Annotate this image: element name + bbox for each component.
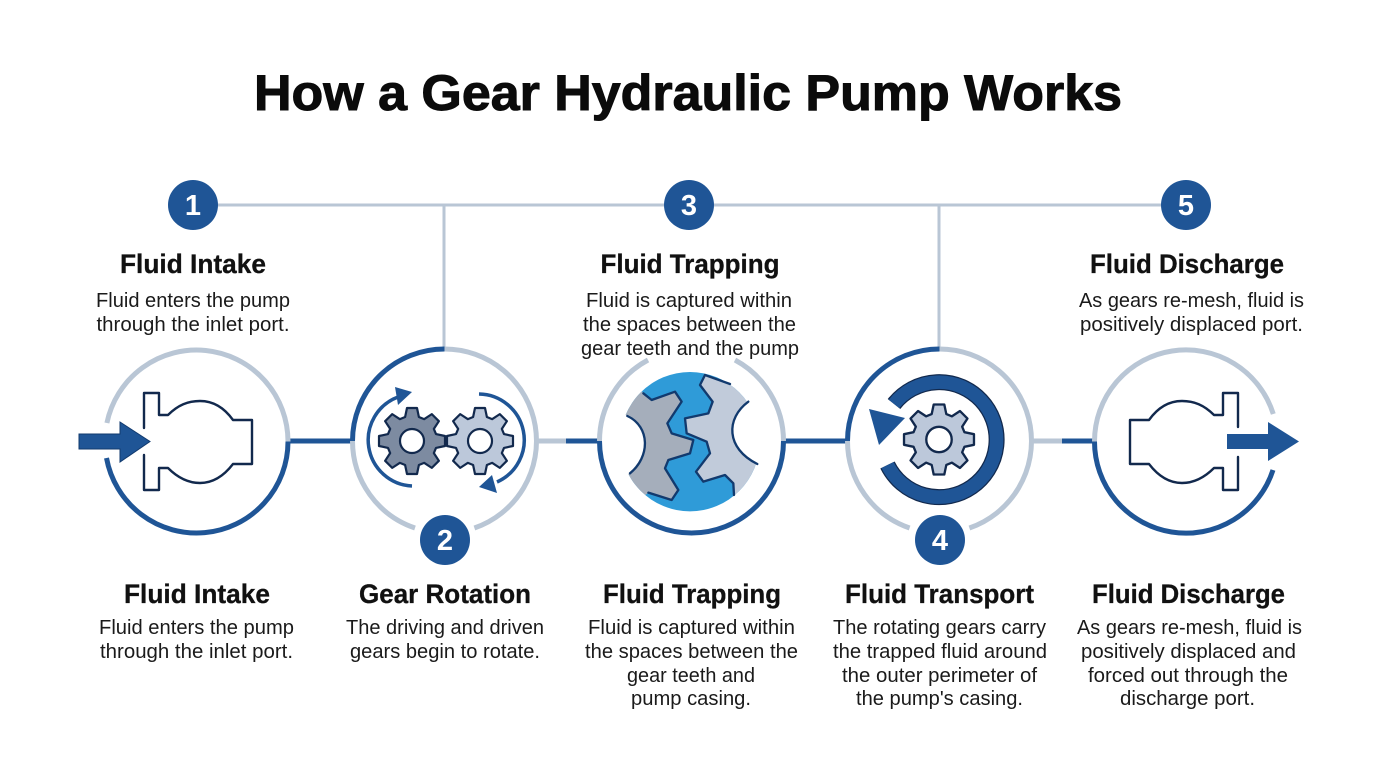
badge 3: 3: [681, 190, 697, 222]
description: gear rotation: The driving and driven: [346, 616, 544, 639]
description: fluid discharge: discharge port.: [1120, 687, 1255, 710]
description: fluid trapping: [585, 616, 798, 710]
heading: fluid intake: Fluid Intake: [124, 579, 270, 609]
left concave cut: [613, 407, 645, 483]
gear cross-section: [626, 372, 758, 512]
badge 4: 4: [932, 525, 948, 557]
badge 2: 2: [437, 525, 453, 557]
description: fluid trapping: gear teeth and: [627, 664, 755, 687]
description: fluid intake: [96, 289, 290, 336]
icon: fluid discharge circle: [1094, 350, 1299, 533]
center gear: [904, 405, 974, 474]
gear outlines: [627, 375, 757, 500]
heading: gear rotation: Gear Rotation: [359, 579, 531, 609]
pump body outline: [144, 393, 252, 490]
description: fluid transport: the pump's casing.: [856, 687, 1023, 710]
heading: fluid discharge: Fluid Discharge: [1090, 249, 1284, 279]
description: fluid trapping: [581, 289, 799, 360]
description: fluid transport: The rotating gears carry: [833, 616, 1047, 639]
description: fluid intake: through the inlet port.: [96, 313, 290, 336]
horizontal connectors: [288, 438, 1094, 444]
description: fluid trapping: gear teeth and the pump: [581, 337, 799, 360]
description: fluid trapping: pump casing.: [631, 687, 751, 710]
badge 4: [915, 515, 965, 565]
left gear: [626, 391, 692, 499]
description: fluid discharge: positively displaced port.: [1080, 313, 1303, 336]
description: fluid transport: [833, 616, 1047, 710]
step 1 bottom block: [99, 579, 294, 663]
badge 5: 5: [1178, 190, 1194, 222]
description: fluid trapping: the spaces between the: [583, 313, 796, 336]
right gear: [686, 376, 756, 494]
description: fluid trapping: the spaces between the: [585, 640, 798, 663]
driving gear: [379, 408, 445, 474]
description: fluid trapping: Fluid is captured within: [588, 616, 795, 639]
icon: fluid transport circle: [848, 349, 1031, 565]
icon: fluid trapping circle: [597, 360, 784, 533]
heading: fluid trapping: Fluid Trapping: [600, 249, 780, 279]
heading: fluid transport: Fluid Transport: [845, 579, 1034, 609]
pump body outline: [1130, 393, 1238, 490]
step 4 bottom block: [833, 579, 1047, 710]
step 1 top block: [96, 180, 290, 336]
description: fluid trapping: Fluid is captured within: [586, 289, 792, 312]
description: fluid discharge: As gears re-mesh, fluid is: [1077, 616, 1302, 639]
title: How a Gear Hydraulic Pump Works: [254, 65, 1122, 121]
step 5 bottom block: [1077, 579, 1302, 710]
badge 5: [1161, 180, 1211, 230]
inlet arrow: [79, 422, 150, 462]
description: fluid intake: Fluid enters the pump: [96, 289, 290, 312]
description: fluid discharge: [1077, 616, 1302, 710]
rotation arrow right: [479, 394, 524, 493]
description: fluid discharge: [1079, 289, 1304, 336]
heading: fluid discharge: Fluid Discharge: [1092, 579, 1285, 609]
heading: fluid intake: Fluid Intake: [120, 249, 266, 279]
description: fluid intake: through the inlet port.: [100, 640, 293, 663]
icon: fluid intake circle: [79, 350, 288, 533]
description: fluid discharge: As gears re-mesh, fluid is: [1079, 289, 1304, 312]
step 3 top block: [581, 180, 799, 360]
badge 1: [168, 180, 218, 230]
rotation arrow left: [368, 387, 412, 486]
top timeline connector: [216, 205, 1164, 350]
circular arrow: [869, 382, 997, 497]
driven gear: [447, 408, 513, 474]
badge 3: [664, 180, 714, 230]
description: fluid transport: the outer perimeter of: [842, 664, 1037, 687]
description: fluid intake: Fluid enters the pump: [99, 616, 294, 639]
description: gear rotation: gears begin to rotate.: [350, 640, 540, 663]
step 3 bottom block: [585, 579, 798, 710]
step 5 top block: [1079, 180, 1304, 336]
description: fluid discharge: forced out through the: [1088, 664, 1288, 687]
right concave cut: [732, 393, 767, 473]
description: fluid transport: the trapped fluid around: [833, 640, 1047, 663]
description: fluid discharge: positively displaced and: [1081, 640, 1296, 663]
description: fluid intake: [99, 616, 294, 663]
step 2 bottom block: [346, 579, 544, 663]
description: gear rotation: [346, 616, 544, 663]
heading: fluid trapping: Fluid Trapping: [603, 579, 781, 609]
outlet arrow: [1227, 422, 1299, 461]
badge 2: [420, 515, 470, 565]
icon: gear rotation circle: [352, 349, 536, 565]
badge 1: 1: [185, 190, 201, 222]
